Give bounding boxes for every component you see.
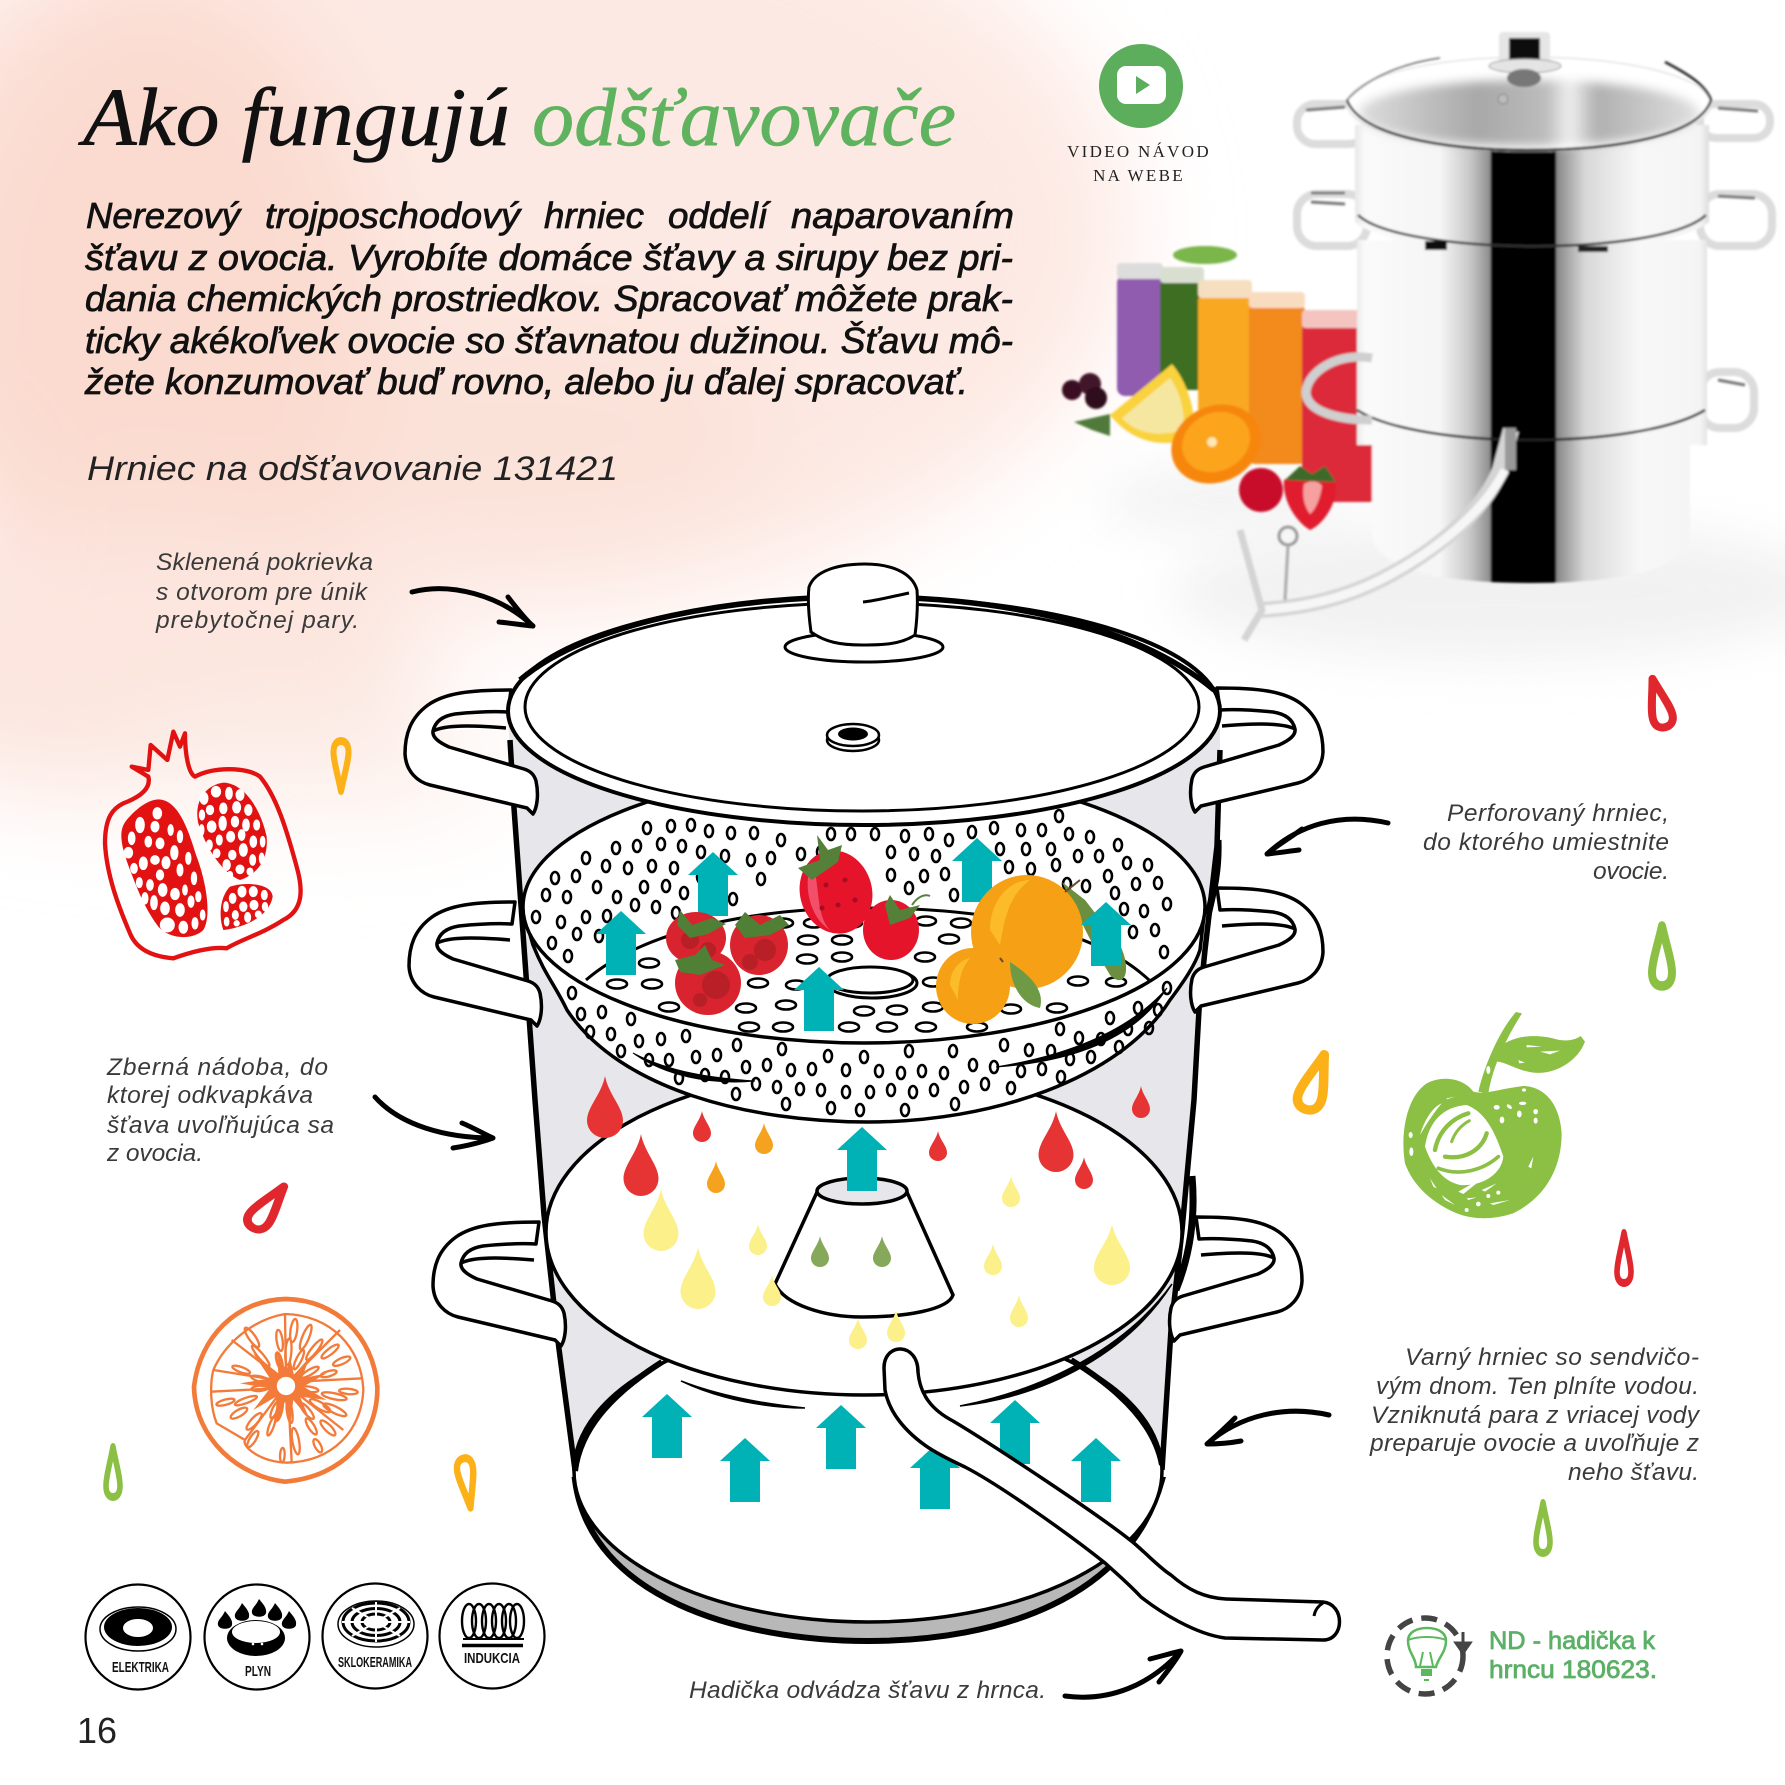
icon: gas burner: PLYN	[245, 1663, 271, 1680]
spout tube	[1260, 430, 1511, 610]
intro paragraph: hrniec	[544, 195, 644, 236]
handle: top right	[1191, 688, 1323, 812]
intro paragraph: dania chemických prostriedkov. Spracovať môžete prak-	[85, 278, 1013, 319]
basket wall holes	[532, 810, 1171, 1116]
annotation: glass lid	[155, 549, 373, 634]
steamer handles	[1297, 104, 1772, 428]
accessory note	[1489, 1627, 1657, 1684]
arrow: to cooking pot	[1207, 1411, 1329, 1444]
annotation: glass lid: prebytočnej pary.	[155, 607, 359, 634]
lid	[1347, 57, 1711, 151]
lid	[508, 564, 1220, 825]
title	[78, 71, 956, 163]
intro paragraph: oddelí	[668, 195, 771, 236]
upper body	[1355, 125, 1709, 252]
juice drops	[587, 1076, 1150, 1349]
title: odšťavovače	[532, 71, 956, 163]
intro paragraph	[84, 195, 1014, 402]
annotation: collecting vessel	[106, 1054, 334, 1167]
annotation: perforated pot	[1423, 800, 1669, 885]
icon: electric hob: ELEKTRIKA	[112, 1659, 169, 1676]
annotation: collecting vessel: šťava uvoľňujúca sa	[107, 1112, 334, 1139]
annotation: collecting vessel: ktorej odkvapkáva	[107, 1082, 313, 1109]
annotation: collecting vessel: Zberná nádoba, do	[106, 1054, 328, 1081]
illustration: pomegranate	[105, 732, 301, 958]
annotation: perforated pot: Perforovaný hrniec,	[1447, 800, 1669, 827]
fruit: strawberries	[790, 835, 930, 960]
video caption: NA WEBE	[1093, 166, 1185, 185]
lid knob	[785, 564, 943, 662]
arrow: to lid	[412, 589, 533, 626]
icon: accessory tip bulb	[1387, 1618, 1470, 1694]
product name: Hrniec na odšťavovanie 131421	[87, 450, 618, 488]
collecting vessel	[546, 1069, 1182, 1408]
icon: electric hob	[86, 1584, 190, 1690]
lower body	[1372, 438, 1690, 583]
perforated basket	[522, 771, 1205, 1122]
lower left handle	[1306, 357, 1372, 420]
handle: middle left	[409, 902, 541, 1026]
central cone	[775, 1178, 953, 1317]
annotation: collecting vessel: z ovocia.	[106, 1140, 203, 1167]
handle: top left	[405, 690, 537, 814]
illustration: orange slice	[194, 1299, 377, 1482]
handle: lower right	[1170, 1217, 1302, 1341]
video caption: VIDEO NÁVOD	[1067, 142, 1211, 161]
cutaway steamer pot diagram	[405, 564, 1340, 1641]
page number: 16	[77, 1710, 117, 1751]
annotation: cooking pot: Varný hrniec so sendvičo-	[1405, 1344, 1699, 1371]
video caption	[1067, 142, 1211, 185]
annotation: hose: Hadička odvádza šťavu z hrnca.	[689, 1677, 1046, 1704]
steam arrows: front	[794, 902, 1131, 1031]
icon: induction	[440, 1584, 544, 1688]
decorative juice drops	[106, 676, 1675, 1553]
fruit: raspberries	[666, 910, 789, 1015]
title: Ako fungujú	[78, 71, 510, 163]
fruit: oranges	[936, 875, 1126, 1024]
lower boiling pot	[574, 1320, 1162, 1641]
icon: induction: INDUKCIA	[464, 1650, 520, 1667]
annotation: cooking pot: Vzniknutá para z vriacej vody	[1371, 1402, 1701, 1429]
arrow: to hose	[1065, 1651, 1181, 1697]
illustration: green apple	[1403, 1012, 1585, 1218]
citrus and berries	[1062, 364, 1336, 530]
icon: glass ceramic hob	[322, 1584, 428, 1688]
handle: lower left	[433, 1222, 565, 1346]
rim between middle and lower	[1357, 410, 1705, 440]
handle: middle right	[1191, 888, 1323, 1012]
pot walls	[508, 720, 1220, 1470]
basket centre ring	[827, 967, 917, 998]
intro paragraph: trojposchodový	[265, 195, 522, 236]
steam arrow: centre	[837, 1127, 887, 1191]
intro paragraph: Nerezový	[86, 195, 242, 236]
intro paragraph: šťavu z ovocia. Vyrobíte domáce šťavy a sirupy bez pri-	[85, 237, 1013, 278]
annotation: glass lid: Sklenená pokrievka	[156, 549, 373, 576]
arrow: to perforated pot	[1267, 819, 1388, 854]
annotation: glass lid: s otvorom pre únik	[156, 579, 369, 606]
icon: gas burner	[204, 1584, 310, 1690]
accessory note: ND - hadička k	[1489, 1627, 1655, 1655]
product photo	[1062, 32, 1785, 660]
video icon	[1099, 44, 1183, 128]
icon: glass ceramic hob: SKLOKERAMIKA	[338, 1654, 412, 1671]
accessory note: hrncu 180623.	[1489, 1656, 1657, 1684]
annotation: cooking pot: neho šťavu.	[1568, 1459, 1699, 1486]
intro paragraph: naparovaním	[791, 195, 1014, 236]
drain hose	[884, 1349, 1340, 1640]
annotation: perforated pot: ovocie.	[1593, 858, 1669, 885]
annotation: cooking pot: preparuje ovocie a uvoľňuje z	[1369, 1430, 1699, 1457]
steam arrows: lower pot	[642, 1394, 1121, 1509]
steam arrows: basket	[596, 838, 1002, 975]
jars	[1117, 246, 1376, 502]
background: peach watercolor wash	[0, 0, 1130, 820]
middle body	[1357, 240, 1707, 445]
annotation: perforated pot: do ktorého umiestnite	[1423, 829, 1669, 856]
intro paragraph: ticky akékoľvek ovocie so šťavnatou dužinou. Šťavu mô-	[85, 320, 1013, 361]
annotation: cooking pot: vým dnom. Ten plníte vodou.	[1376, 1373, 1699, 1400]
annotation: cooking pot	[1369, 1344, 1701, 1486]
intro paragraph: žete konzumovať buď rovno, alebo ju ďalej spracovať.	[84, 361, 968, 402]
basket floor holes	[607, 916, 1126, 1032]
steam vent	[827, 724, 879, 751]
arrow: to collecting vessel	[375, 1097, 493, 1148]
